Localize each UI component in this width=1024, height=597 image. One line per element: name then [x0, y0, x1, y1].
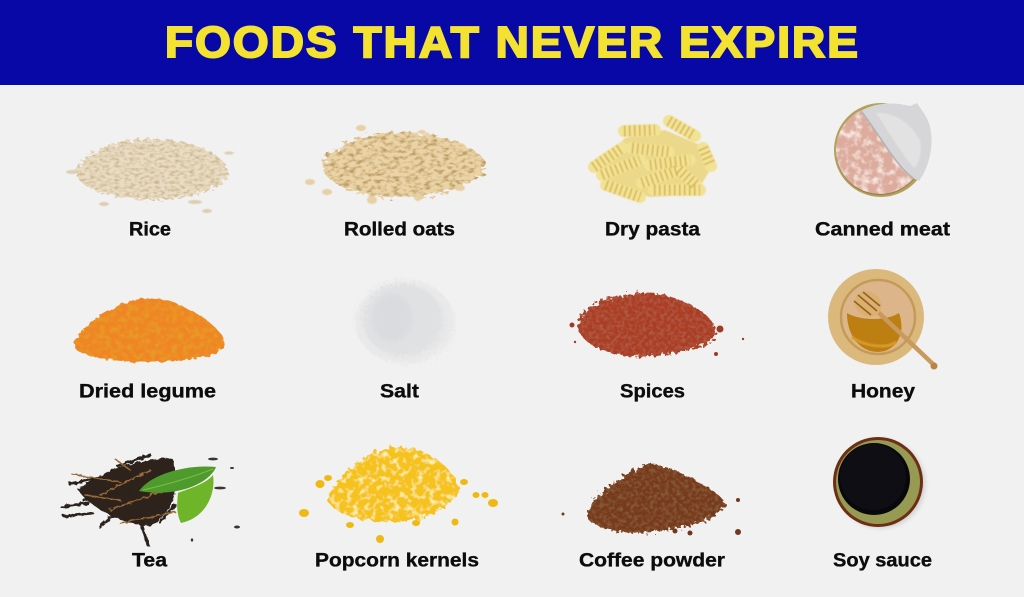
label: Honey — [851, 380, 915, 402]
peeled lid — [861, 103, 932, 181]
green leaves — [177, 475, 213, 523]
icon: oats pile — [305, 125, 486, 204]
item: popcorn kernels — [299, 447, 498, 572]
icon: red spice pile — [570, 293, 744, 357]
icon: tea leaves — [62, 455, 240, 545]
label: Canned meat — [815, 218, 951, 240]
icon: coffee pile — [562, 463, 741, 536]
item: tea — [62, 455, 240, 572]
label: Soy sauce — [833, 550, 932, 572]
label: Coffee powder — [579, 550, 725, 572]
item: dried legume — [74, 298, 225, 402]
label: Dry pasta — [605, 218, 700, 240]
label: Rolled oats — [344, 218, 455, 240]
label: Rice — [129, 218, 171, 240]
label: Spices — [620, 380, 685, 402]
label: Salt — [380, 380, 420, 402]
dipper — [850, 286, 938, 370]
item: coffee powder — [562, 463, 741, 572]
icon: fusilli pile — [594, 121, 711, 197]
icon: salt pile — [355, 280, 455, 364]
title banner — [0, 0, 1024, 85]
item: rice — [66, 139, 234, 240]
icon: red lentil pile — [74, 298, 225, 362]
item: canned meat — [815, 103, 951, 240]
icon: rice pile — [66, 139, 234, 213]
icon: honey bowl with dipper — [828, 269, 938, 370]
item: honey — [828, 269, 938, 402]
label: Dried legume — [79, 380, 216, 402]
title: FOODS THAT NEVER EXPIRE — [165, 18, 860, 67]
item: rolled oats — [305, 125, 486, 240]
item: dry pasta — [594, 121, 711, 240]
icon: soy sauce bowl — [833, 437, 925, 528]
icon: corn pile — [299, 447, 498, 543]
label: Popcorn kernels — [315, 550, 479, 572]
icon: open can — [834, 103, 932, 197]
label: Tea — [132, 550, 167, 572]
item: spices — [570, 293, 744, 402]
item: salt — [355, 280, 455, 402]
item: soy sauce — [833, 437, 932, 572]
